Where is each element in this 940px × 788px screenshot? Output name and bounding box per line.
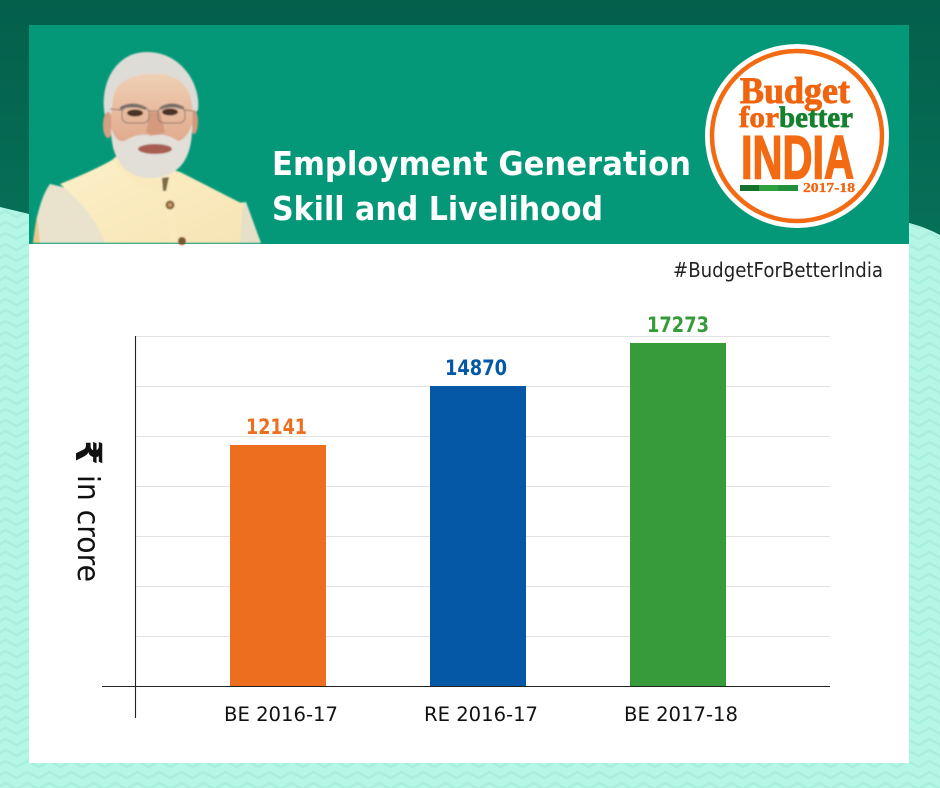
Budget for better India badge: Budget xyxy=(740,71,851,112)
beard xyxy=(111,124,192,178)
x axis labels: BE 2017-18 xyxy=(624,703,738,726)
y axis label xyxy=(67,440,108,582)
background: mint zigzag lower area xyxy=(0,207,940,788)
chart axes xyxy=(102,336,830,718)
banner title xyxy=(272,144,691,228)
Budget for better India badge: for xyxy=(739,101,779,134)
banner title: Skill and Livelihood xyxy=(272,189,603,228)
left sleeve xyxy=(33,184,108,243)
background: dark green upper area xyxy=(0,0,940,260)
Budget for better India badge: 2017-18 xyxy=(803,180,855,195)
spectacles xyxy=(110,107,193,123)
Budget for better India badge: better xyxy=(779,101,853,134)
x axis labels: BE 2016-17 xyxy=(224,703,338,726)
face xyxy=(111,74,193,176)
banner title: Employment Generation xyxy=(272,144,691,183)
bar: BE 2017-18: 17273 xyxy=(647,313,709,337)
bar chart xyxy=(67,313,830,726)
eyebrows xyxy=(120,104,146,110)
header banner xyxy=(29,25,909,245)
lips xyxy=(138,144,172,154)
y axis label: ₹ xyxy=(67,440,108,465)
bar: BE 2017-18 xyxy=(630,313,726,686)
hair xyxy=(104,52,198,118)
right sleeve xyxy=(222,202,261,243)
bar: BE 2016-17 xyxy=(230,415,326,686)
vest xyxy=(60,155,243,243)
bar: RE 2016-17 xyxy=(430,356,526,686)
portrait photo illustration xyxy=(33,52,261,245)
white content panel xyxy=(29,244,909,763)
collar and placket xyxy=(112,155,180,243)
ears xyxy=(103,112,113,138)
x axis labels xyxy=(224,703,738,726)
badge green stripe xyxy=(740,185,798,191)
x axis labels: RE 2016-17 xyxy=(424,703,538,726)
hashtag: #BudgetForBetterIndia xyxy=(673,258,883,282)
neck shadow xyxy=(162,177,169,191)
Budget for better India badge xyxy=(705,44,889,228)
y axis label: in crore xyxy=(70,475,105,582)
Budget for better India badge: INDIA xyxy=(741,124,854,192)
bar: RE 2016-17: 14870 xyxy=(445,356,507,380)
bar: BE 2016-17: 12141 xyxy=(246,415,307,439)
eyes xyxy=(127,110,143,116)
nose xyxy=(146,112,165,135)
vest buttons xyxy=(166,200,174,210)
